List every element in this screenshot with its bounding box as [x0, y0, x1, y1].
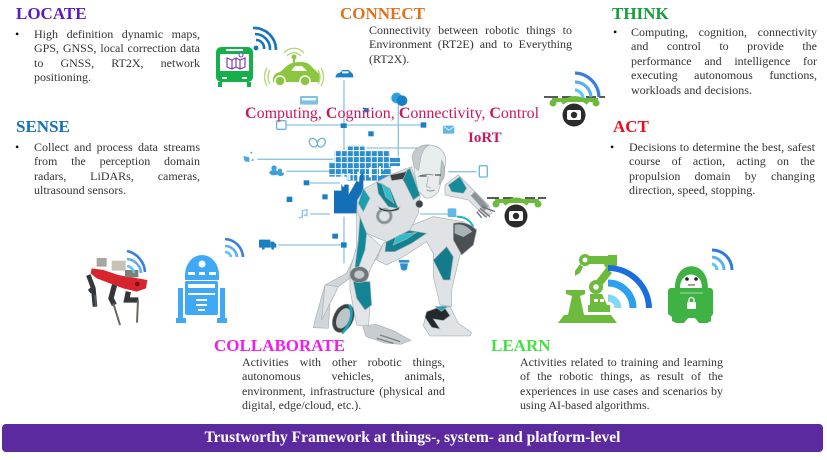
heading: THINK: THINK [612, 4, 669, 23]
icon: robotic arm with wifi [558, 254, 649, 323]
text: THINK body: executing autonomous functions, [631, 68, 817, 82]
icon: padlock robot wifi [712, 250, 732, 270]
text: CONNECT body: Connectivity between robotic things to [369, 23, 572, 37]
icon: drone wifi [575, 73, 599, 98]
arm right [445, 175, 495, 218]
text: CONNECT body: Environment (RT2E) and to Everything [369, 37, 572, 51]
text: COLLABORATE body: environment, infrastructure (physical and [242, 384, 445, 398]
icon: people [269, 165, 284, 176]
icon: connected car [264, 48, 324, 86]
head [412, 145, 446, 198]
skyline [334, 171, 363, 213]
icon: phone [479, 166, 487, 177]
icon: drone with camera middle [487, 198, 546, 228]
text: SENSE bullet: • [15, 140, 19, 154]
text: LEARN body [520, 355, 723, 412]
torso [357, 167, 423, 242]
text: LOCATE bullet: • [15, 27, 19, 41]
text: LOCATE body [34, 27, 200, 84]
icon: delivery truck [259, 240, 276, 250]
text: THINK body: workloads and decisions. [631, 83, 752, 97]
text: THINK bullet: • [613, 25, 617, 39]
text: THINK body: performance and intelligence for [631, 54, 817, 68]
text: SENSE body [34, 140, 200, 197]
icon: bus wifi signal [253, 28, 276, 50]
icon: bus with map [216, 47, 253, 87]
icon: drone with camera top [544, 97, 605, 126]
text: LOCATE body: GPS, GNSS, local correction data [34, 41, 200, 55]
back leg and foot [313, 237, 380, 336]
heading: central functions: Computing, Cognition, Connectivity, Control [245, 105, 539, 122]
text: ACT body [629, 140, 815, 197]
text: THINK body: and control to provide the [631, 39, 817, 53]
heading: LEARN: LEARN [491, 336, 551, 355]
network lines [257, 80, 477, 263]
icon: camera tile [448, 208, 456, 217]
text: COLLABORATE body: autonomous vehicles, animals, [242, 369, 445, 383]
icon group: digital city [287, 108, 426, 248]
text: COLLABORATE body: Activities with other robotic things, [242, 355, 445, 369]
heading: SENSE: SENSE [16, 117, 70, 136]
icon: tablet [277, 121, 286, 129]
heading: COLLABORATE: COLLABORATE [214, 336, 345, 355]
banner: trustworthy framework [2, 424, 823, 452]
icon: dog robot wifi [127, 251, 145, 273]
text: LEARN body: Activities related to training and learning [520, 355, 723, 369]
icon: red quadruped robot [88, 258, 147, 325]
text: SENSE body: from the perception domain [34, 154, 200, 168]
pixel cloud [329, 145, 400, 181]
small network icons [243, 70, 487, 271]
heading: CONNECT: CONNECT [340, 4, 425, 23]
text: CONNECT body [369, 23, 572, 66]
icon: butterfly [308, 137, 327, 149]
icon: chat bubbles [391, 93, 407, 106]
text: THINK body: Computing, cognition, connectivity [631, 25, 817, 39]
text: COLLABORATE body: digital, edge/cloud, etc.). [242, 398, 361, 412]
text: LOCATE body: to GNSS, RT2X, network [34, 56, 200, 70]
text: SENSE body: Collect and process data streams [34, 140, 200, 154]
heading: ACT: ACT [613, 117, 649, 136]
icon: envelope [443, 126, 454, 134]
icon: green padlock robot [668, 266, 713, 323]
text: ACT body: course of action, acting on the [629, 154, 815, 168]
text: CONNECT body: (RT2X). [369, 52, 409, 66]
text: ACT body: propulsion domain by changing [629, 169, 815, 183]
banner: trustworthy framework: Trustworthy Framework at things-, system- and platform-level [204, 429, 620, 446]
heading: LOCATE: LOCATE [16, 4, 87, 23]
text: ACT bullet: • [610, 140, 614, 154]
front leg [377, 217, 477, 336]
text: THINK body [631, 25, 817, 97]
text: SENSE body: radars, LiDARs, cameras, [34, 169, 200, 183]
icon: small car [335, 70, 353, 77]
icon: small bus [300, 96, 318, 105]
text: LEARN body: experiences in use cases and scenarios by [520, 384, 723, 398]
robot [313, 145, 495, 344]
icon: blue droid robot [176, 255, 227, 323]
icon: bell [399, 260, 409, 271]
text: ACT body: direction, speed, stopping. [629, 183, 755, 197]
text: LEARN body: of the robotic things, as result of the [520, 369, 723, 383]
text: LEARN body: using AI-based algorithms. [520, 398, 650, 412]
text: ACT body: Decisions to determine the best, safest [629, 140, 815, 154]
icon: droid wifi [225, 239, 243, 257]
text: SENSE body: ultrasound sensors. [34, 183, 126, 197]
text: LOCATE body: positioning. [34, 70, 91, 84]
text: COLLABORATE body [242, 355, 445, 412]
arm left [350, 210, 411, 344]
icon: music note [299, 210, 307, 218]
text: LOCATE body: High definition dynamic maps, [34, 27, 200, 41]
label: IoRT: IoRT [468, 130, 502, 146]
icon: megaphone [243, 152, 254, 162]
